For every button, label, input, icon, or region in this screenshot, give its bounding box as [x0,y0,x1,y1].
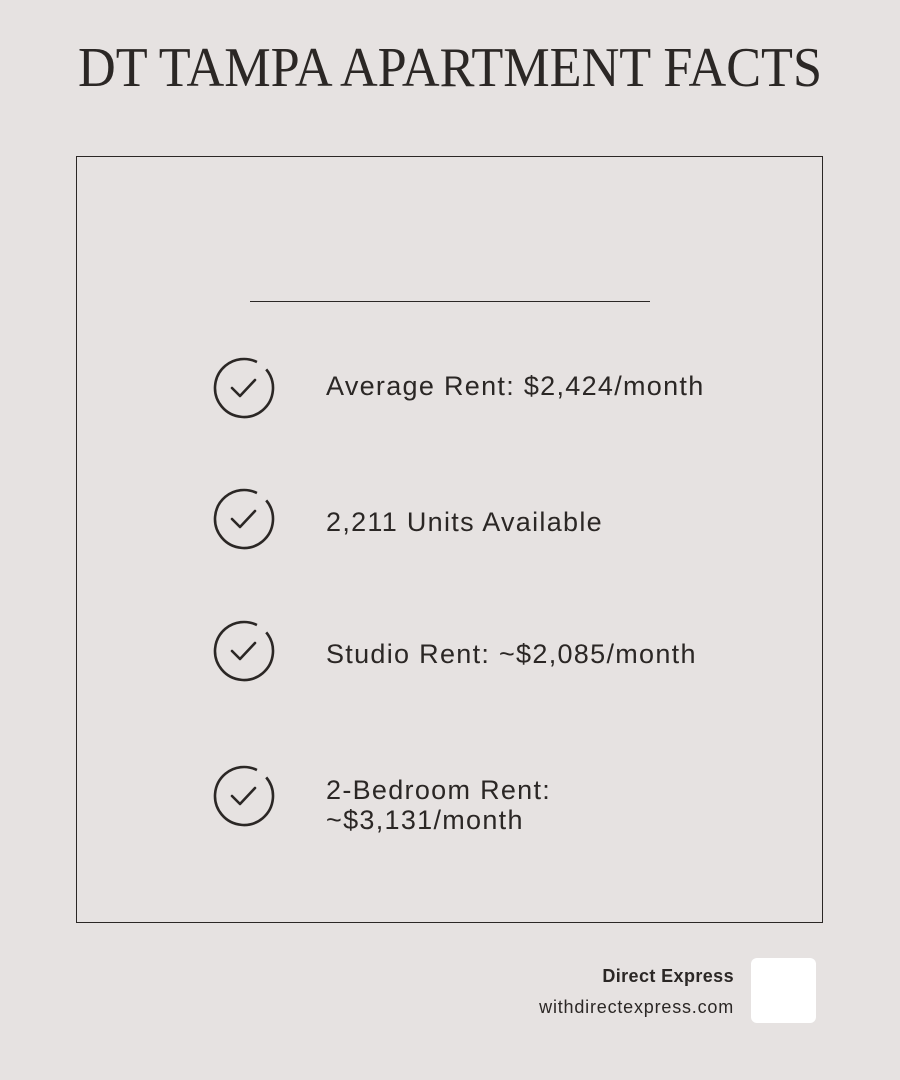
footer brand text: Direct Express [602,966,734,986]
panel: facts box [76,156,823,923]
fact: units available [214,488,603,550]
footer brand text [539,966,734,1017]
title: DT TAMPA APARTMENT FACTS [78,37,822,99]
fact: 2-bedroom rent: 2-Bedroom Rent: [326,775,551,805]
icon: check circle [214,358,274,418]
fact: units available: 2,211 Units Available [326,507,603,537]
divider line [250,301,650,302]
icon: check circle [214,766,274,826]
fact: average rent [214,358,705,418]
icon: check circle [214,488,274,550]
fact: studio rent: Studio Rent: ~$2,085/month [326,639,697,669]
footer brand text: withdirectexpress.com [539,997,734,1017]
icon: check circle [214,620,274,682]
fact: 2-bedroom rent [214,766,551,835]
fact: studio rent [214,620,697,682]
fact: 2-bedroom rent: ~$3,131/month [326,805,524,835]
fact: average rent: Average Rent: $2,424/month [326,371,705,401]
logo placeholder [751,958,816,1023]
